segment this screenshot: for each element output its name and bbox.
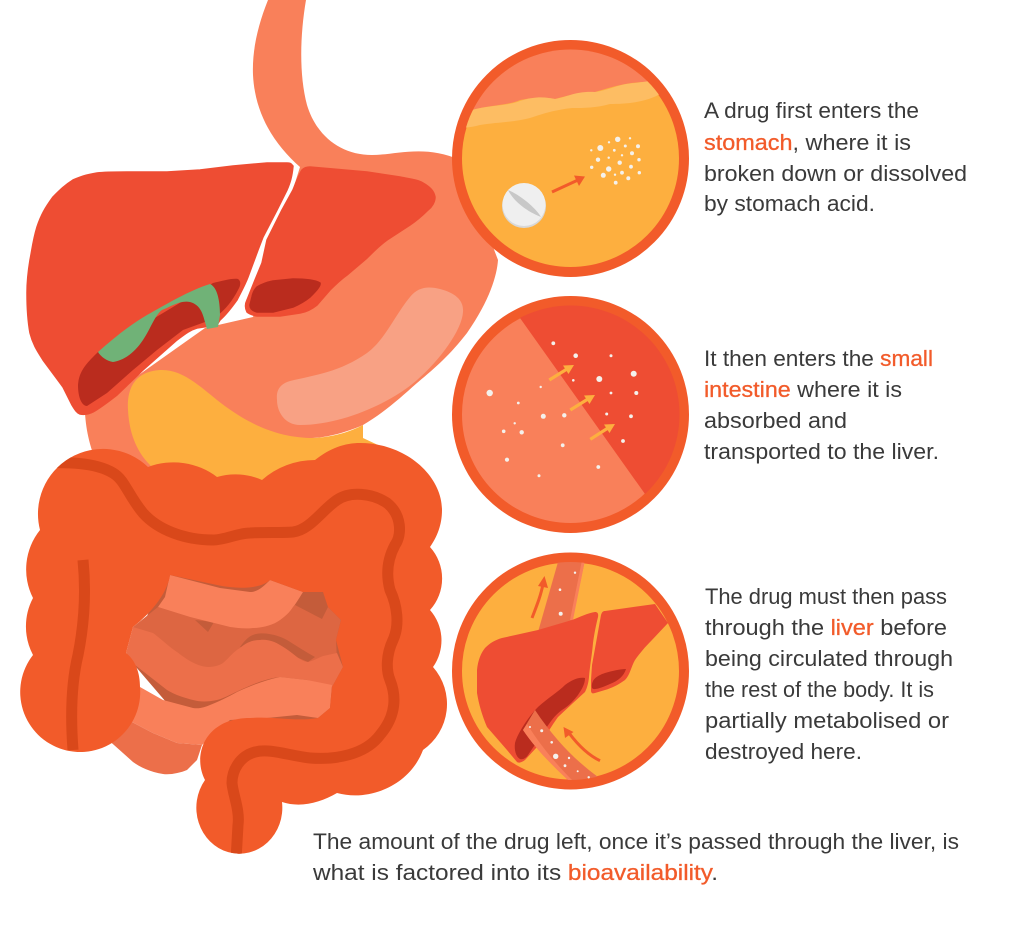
left lobe shadow [78, 279, 240, 406]
text: small intestine step: It then enters the small [704, 346, 933, 371]
pancreas [128, 370, 380, 490]
text: liver step [705, 584, 953, 764]
oesophagus and stomach [85, 0, 498, 470]
text: liver step: partially metabolised or [705, 708, 950, 733]
text: small intestine step: absorbed and [704, 408, 847, 433]
stomach highlight [277, 288, 463, 425]
text: liver step: destroyed here. [705, 739, 862, 764]
text: bioavailability conclusion: what is factored into its bioavailability . [312, 860, 718, 885]
stomach lining [473, 50, 648, 110]
digestive system illustration [20, 0, 498, 860]
text: liver step: through the liver before [705, 615, 947, 640]
arrow: pill to particles [552, 176, 585, 192]
left lobe of liver [27, 163, 293, 414]
gallbladder [98, 284, 220, 362]
text: liver step: The drug must then pass [705, 584, 947, 609]
upper blood vessel [538, 562, 584, 630]
text: bioavailability conclusion: The amount of the drug left, once it’s passed through the liver, is [313, 829, 959, 854]
text: liver step: being circulated through [705, 646, 953, 671]
liver illustration shadows [515, 678, 585, 759]
text: small intestine step [704, 346, 939, 464]
liver illustration right lobe [591, 604, 668, 693]
text: stomach step: A drug first enters the [704, 98, 919, 123]
lower blood vessel [523, 710, 598, 780]
magnified view: small intestine [457, 290, 700, 528]
magnified view: liver [457, 555, 684, 800]
magnified view: stomach [450, 30, 690, 272]
text: stomach step: stomach, where it is [704, 130, 911, 155]
small intestine loops [105, 570, 345, 774]
liver illustration left lobe [477, 612, 598, 763]
intestine wall [520, 306, 680, 494]
absorption arrows [549, 365, 615, 439]
large intestine fold lines [40, 463, 400, 860]
text: stomach step: broken down or dissolved [704, 161, 967, 186]
dissolved particles [590, 137, 641, 185]
blood flow arrows [532, 576, 600, 761]
text: small intestine step: intestine where it is [704, 377, 902, 402]
liver [27, 163, 435, 414]
text: small intestine step: transported to the liver. [704, 439, 939, 464]
absorbed particles [486, 341, 638, 477]
text: bioavailability conclusion [312, 829, 959, 885]
icon: pill [502, 183, 546, 228]
large intestine [20, 443, 447, 860]
text: liver step: the rest of the body. It is [705, 677, 934, 702]
text: stomach step [704, 98, 967, 216]
acid surface wave [455, 81, 662, 128]
right lobe shadow [250, 279, 320, 312]
text: stomach step: by stomach acid. [704, 191, 875, 216]
blood particles [529, 572, 590, 778]
right lobe of liver [246, 167, 435, 316]
